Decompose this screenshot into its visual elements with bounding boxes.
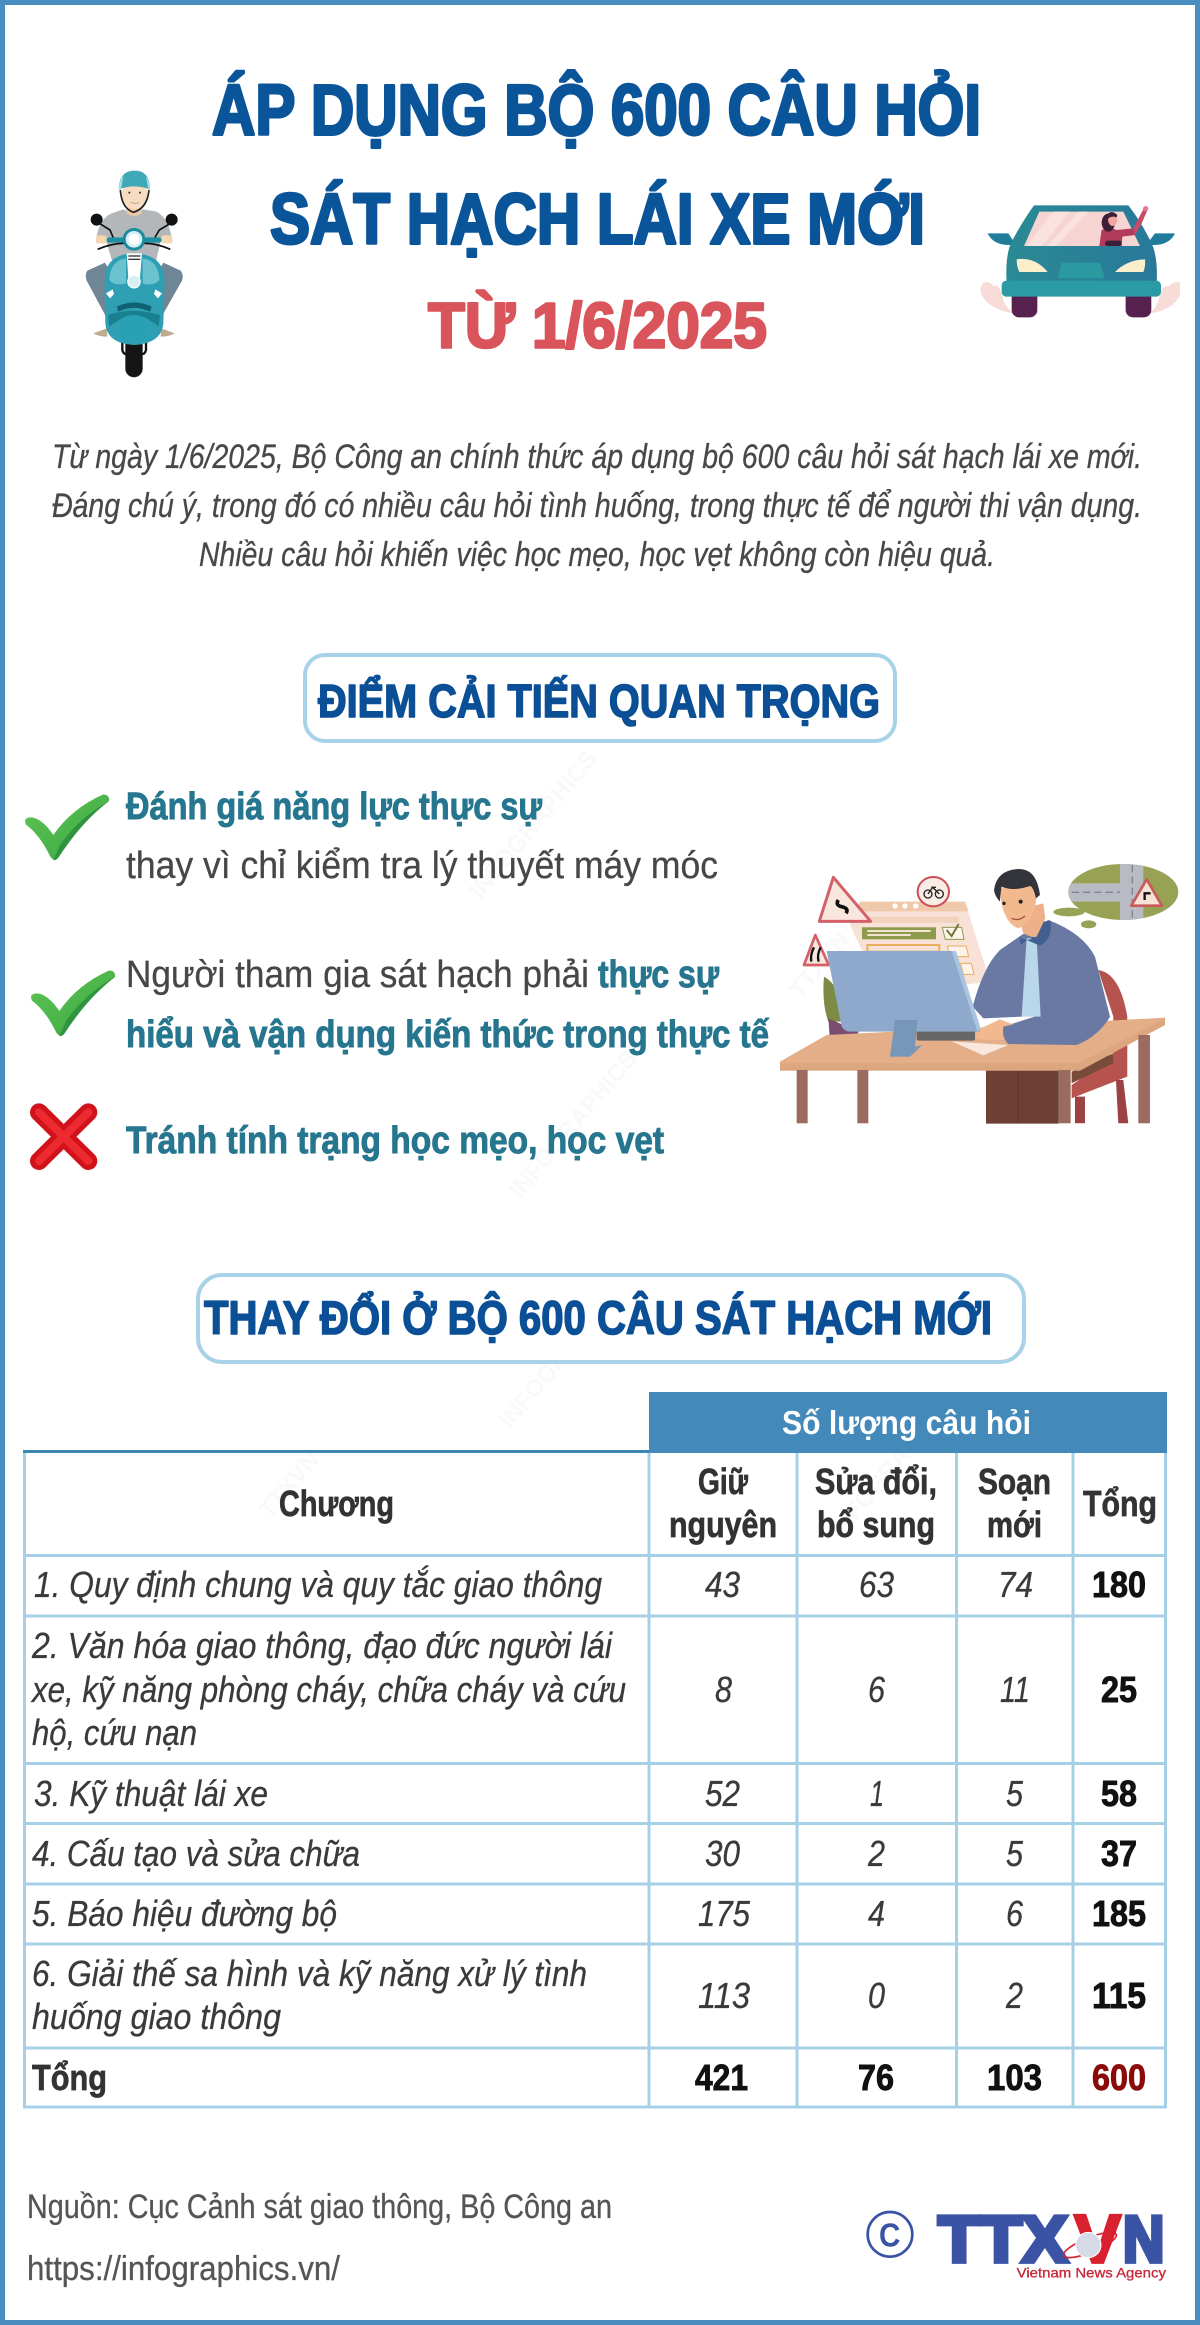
heading: changes in the 600 question set: THAY ĐỔI Ở BỘ 600 CÂU SÁT HẠCH MỚI [204,1291,992,1344]
row 1: 43 [705,1564,740,1605]
total row: 421 [695,2057,748,2098]
row 1: 74 [998,1564,1033,1605]
column headers: mới [987,1504,1042,1545]
row 4 [32,1833,1137,1874]
total row: 103 [987,2057,1042,2098]
row 3: 1 [870,1773,884,1814]
row 6: 6. Giải thế sa hình và kỹ năng xử lý tình [32,1953,587,1994]
total row: 600 [1092,2057,1146,2098]
logo: TTXVN: TTX [938,2203,1068,2276]
watermarks [254,746,963,1544]
item 1: assess real ability: thay vì chỉ kiểm tra lý thuyết máy móc [126,845,718,887]
row 3 [34,1773,1137,1814]
total row [32,2057,1146,2098]
row 2: 11 [1000,1669,1030,1710]
source note: https://infographics.vn/ [27,2250,341,2288]
row 6: 113 [698,1975,750,2016]
row 2: 8 [715,1669,732,1710]
row 5: 185 [1092,1893,1146,1934]
item 2: understand and apply: Người tham gia sát hạch phải [126,954,589,996]
column headers [279,1461,1157,1545]
item 2: understand and apply [126,954,770,1056]
row 4: 4. Cấu tạo và sửa chữa [32,1833,360,1874]
item 1: assess real ability: Đánh giá năng lực thực sự [126,786,542,828]
heading: changes in the 600 question set [198,1275,1024,1362]
column headers: Tổng [1083,1483,1157,1524]
table header band: Số lượng câu hỏi [782,1404,1031,1441]
watermarks: INFOGRAPHICS [464,746,603,904]
watermarks: TTXVN [784,926,855,1004]
logo: TTXVN: Vietnam News Agency [1017,2264,1166,2280]
item 2: understand and apply: thực sự [598,954,719,996]
heading: key improvements [305,655,895,741]
row 4: 37 [1101,1833,1137,1874]
row 2: xe, kỹ năng phòng cháy, chữa cháy và cứu [30,1669,626,1710]
icon: check mark 1 [25,794,109,860]
logo: TTXVN: N [1123,2203,1164,2276]
icon: scooter rider [86,171,183,377]
row 2: 2. Văn hóa giao thông, đạo đức người lái [31,1625,613,1666]
row 2: hộ, cứu nạn [32,1712,197,1753]
row 1: 180 [1092,1564,1146,1605]
table: questions by chapter [23,1392,1167,2107]
row 4: 30 [705,1833,740,1874]
title: SÁT HẠCH LÁI XE MỚI [270,180,925,260]
row 1: 1. Quy định chung và quy tắc giao thông [34,1564,602,1605]
watermarks: INFOGRAPHICS [824,1386,963,1544]
illustration: man at computer desk [780,860,1178,1124]
row 5: 5. Báo hiệu đường bộ [32,1893,337,1934]
item 2: understand and apply: hiểu và vận dụng kiến thức trong thực tế [126,1014,770,1056]
column headers: nguyên [669,1504,777,1545]
intro text [52,438,1142,574]
heading: key improvements: ĐIỂM CẢI TIẾN QUAN TRỌNG [318,675,880,727]
row 5: 6 [1006,1893,1024,1934]
row 3: 52 [705,1773,740,1814]
logo: TTXVN: V [1074,2202,1122,2278]
title: ÁP DỤNG BỘ 600 CÂU HỎI [212,70,981,150]
total row: 76 [858,2057,894,2098]
title: TỪ 1/6/2025 [428,290,767,362]
column headers: Soạn [978,1461,1051,1502]
logo: TTXVN [868,2202,1166,2280]
row 3: 58 [1101,1773,1137,1814]
row 6: 115 [1092,1975,1146,2016]
row 1: 63 [859,1564,894,1605]
total row: Tổng [32,2057,107,2098]
source note: Nguồn: Cục Cảnh sát giao thông, Bộ Công an [27,2188,612,2226]
watermarks: INFOGRAPHICS [494,1276,633,1434]
row 5 [32,1893,1146,1934]
row 3: 3. Kỹ thuật lái xe [34,1773,268,1814]
watermarks: INFOGRAPHICS [504,1046,643,1204]
icon: check mark 2 [31,970,115,1036]
row 5: 175 [698,1893,751,1934]
row 6: 0 [868,1975,885,2016]
column headers: bổ sung [817,1504,935,1545]
item 3: avoid rote learning: Tránh tính trạng học mẹo, học vẹt [126,1120,664,1162]
row 5: 4 [868,1893,885,1934]
row 4: 5 [1006,1833,1024,1874]
row 6 [32,1953,1146,2037]
column headers: Giữ [698,1461,749,1502]
watermarks: TTXVN [254,1446,325,1524]
row 2 [30,1625,1137,1753]
item 1: assess real ability [126,786,718,887]
row 2: 25 [1101,1669,1137,1710]
title [212,70,981,362]
logo: TTXVN: C [879,2218,900,2255]
row 1 [34,1564,1146,1605]
row 3: 5 [1006,1773,1024,1814]
intro text: Nhiều câu hỏi khiến việc học mẹo, học vẹt không còn hiệu quả. [199,536,995,574]
table header band [649,1392,1167,1453]
column headers: Sửa đổi, [815,1461,937,1502]
row 6: huống giao thông [32,1996,281,2037]
column headers: Chương [279,1483,394,1524]
icon: car with driver [980,205,1180,317]
icon: cross mark [39,1112,88,1161]
source note [27,2188,612,2288]
row 4: 2 [867,1833,885,1874]
row 6: 2 [1005,1975,1023,2016]
row 2: 6 [868,1669,886,1710]
